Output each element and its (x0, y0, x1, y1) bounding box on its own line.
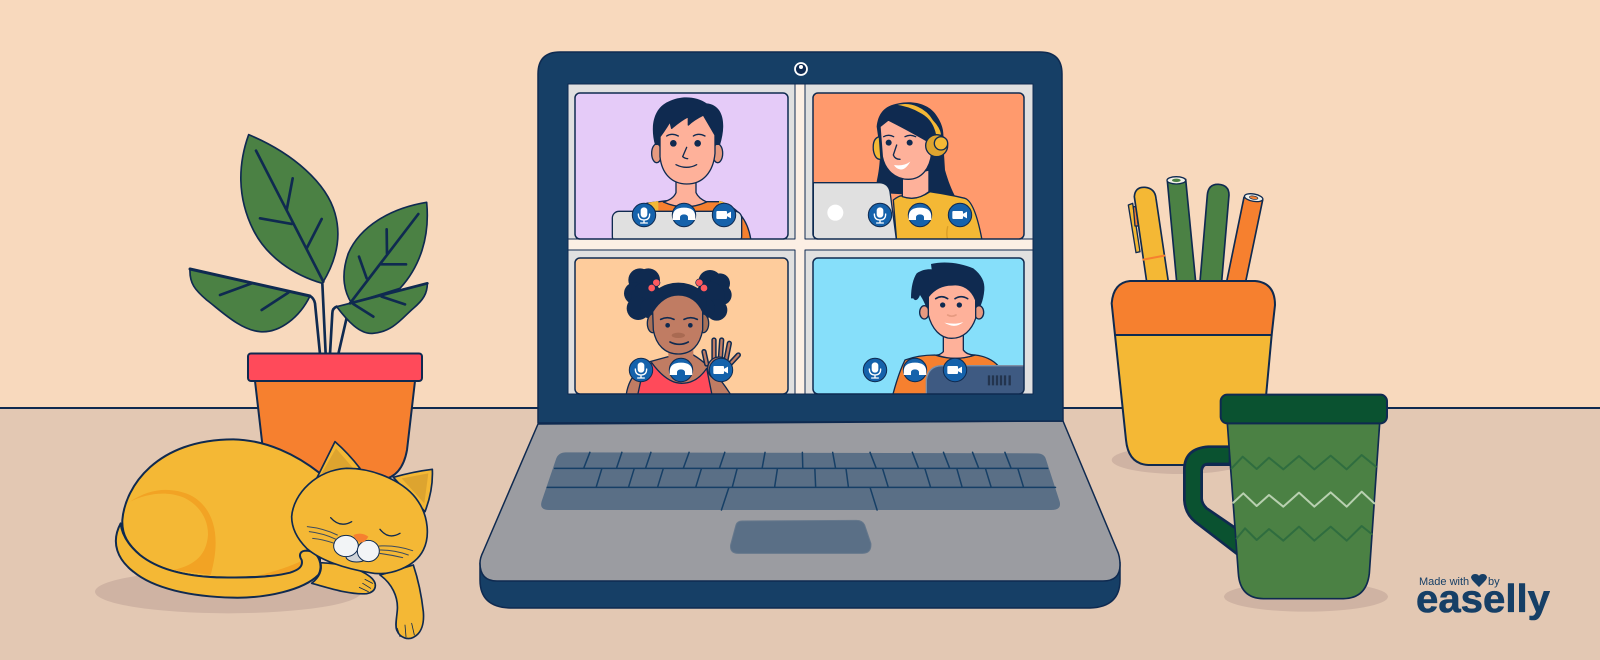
green mug (1184, 395, 1388, 612)
cup orange top (1112, 281, 1275, 335)
cat thigh shading (130, 490, 303, 575)
plant leaves (190, 135, 427, 354)
mug shadow (1224, 582, 1388, 612)
made with love by: Made with (1419, 576, 1469, 588)
screen panel (568, 84, 1033, 394)
laptop keyboard (541, 452, 1060, 510)
made with love by (1419, 574, 1500, 588)
cup yellow body (1115, 335, 1272, 465)
laptop base (480, 562, 1120, 608)
video tile: man with laptop (813, 258, 1027, 397)
mug handle (1184, 447, 1238, 555)
webcam (795, 63, 807, 75)
cat tail (116, 523, 321, 598)
laptop screen frame (538, 52, 1063, 423)
wall background (0, 0, 1600, 408)
laptop (480, 52, 1120, 608)
video tile: boy with laptop (575, 93, 788, 243)
pot rim (248, 354, 422, 381)
cat head (292, 468, 427, 574)
mug body (1227, 423, 1380, 599)
sleeping cat (95, 439, 432, 639)
cat front paw (312, 563, 375, 594)
wordmark: easelly (1416, 578, 1550, 621)
video tile: girl waving (575, 258, 788, 397)
call controls (868, 203, 972, 227)
video tile: woman with headset (813, 93, 1024, 242)
cat hanging leg (380, 565, 424, 639)
call controls (863, 358, 967, 382)
cat ears (317, 442, 432, 512)
laptop trackpad (731, 520, 871, 553)
cat body (122, 439, 320, 578)
mug rim (1221, 395, 1387, 423)
cup shadow (1112, 446, 1248, 474)
cat shadow (95, 570, 362, 613)
desk surface (0, 408, 1600, 660)
green pen (1200, 184, 1229, 282)
cat muzzle (334, 534, 379, 562)
laptop deck (480, 421, 1120, 581)
easelly logo (1416, 574, 1550, 621)
call controls (629, 358, 733, 382)
green pencil (1167, 177, 1196, 282)
call controls (632, 203, 736, 227)
pen cup with pens (1112, 177, 1275, 474)
mug zigzag pattern (1232, 455, 1376, 541)
waving hand (704, 340, 738, 380)
plant in pot (190, 135, 427, 480)
made with love by: by (1488, 576, 1500, 588)
yellow pen (1128, 187, 1168, 282)
pot body (255, 381, 415, 480)
orange pencil (1227, 192, 1263, 282)
cat closed eyes and whiskers (331, 518, 400, 536)
